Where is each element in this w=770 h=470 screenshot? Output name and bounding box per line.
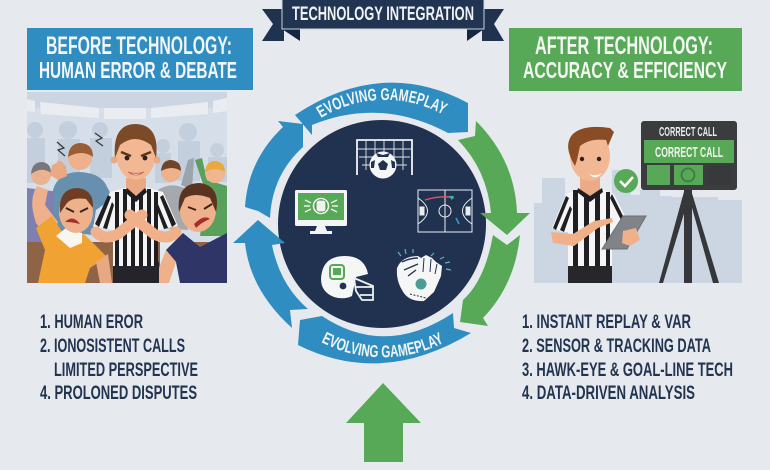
ribbon: evolving gameplay bottom (298, 313, 471, 364)
text block: before technology list: LIMITED PERSPECTIVE (54, 359, 198, 381)
text block: after technology list: 4. DATA-DRIVEN ANALYSIS (522, 382, 695, 404)
scoreboard on tripod (641, 121, 737, 283)
arrow: green up arrow (346, 383, 421, 462)
back green shirt fan (195, 158, 227, 236)
text block: before technology list (40, 311, 198, 404)
front left angry fan (32, 161, 112, 283)
panel: before technology heading (27, 28, 253, 90)
text block: before technology list: 2. IONOSISTENT CALLS (40, 335, 185, 357)
text block: before technology list: 4. PROLONED DISPUTES (40, 382, 197, 404)
icon: baseball glove (397, 249, 451, 301)
ribbon: evolving gameplay top (295, 82, 468, 135)
arrow: blue upper left (245, 121, 303, 218)
panel: before technology heading: HUMAN ERROR & DEBATE (39, 57, 237, 83)
title banner (262, 0, 504, 41)
arrow: blue lower left (233, 220, 308, 328)
icon: football helmet (321, 256, 373, 300)
panel: after technology heading (509, 28, 742, 91)
back left fan (27, 162, 60, 242)
front right angry fan (159, 183, 227, 283)
central navy circle with sports tech icons (278, 120, 486, 328)
referee (93, 124, 178, 283)
panel: before technology heading: BEFORE TECHNOLOGY: (46, 32, 232, 60)
ribbon: evolving gameplay top: EVOLVING GAMEPLAY (316, 88, 448, 118)
illustration: referee with tablet and correct call scoreboard (534, 121, 742, 283)
scoreboard on tripod: CORRECT CALL (655, 144, 723, 161)
arrow: green lower right (460, 235, 520, 326)
ribbon: evolving gameplay bottom: EVOLVING GAMEPLAY (322, 332, 442, 358)
icon: green check badge (614, 169, 638, 193)
icon: monitor with replay (295, 190, 347, 234)
title banner: TECHNOLOGY INTEGRATION (292, 3, 474, 25)
icon: tactics court (418, 190, 472, 232)
arrow: green upper right (458, 121, 530, 235)
referee with tablet (551, 127, 646, 283)
text block: after technology list: 1. INSTANT REPLAY & VAR (522, 311, 691, 333)
back blue shirt fan (53, 143, 113, 235)
text block: before technology list: 1. HUMAN EROR (40, 311, 143, 333)
text block: after technology list (522, 311, 733, 404)
scoreboard on tripod: CORRECT CALL (659, 124, 717, 139)
skyline background (534, 170, 742, 283)
back grey shirt fan (158, 158, 194, 230)
illustration: referee surrounded by angry crowd (27, 92, 227, 283)
icon: soccer goal and ball (357, 140, 412, 178)
